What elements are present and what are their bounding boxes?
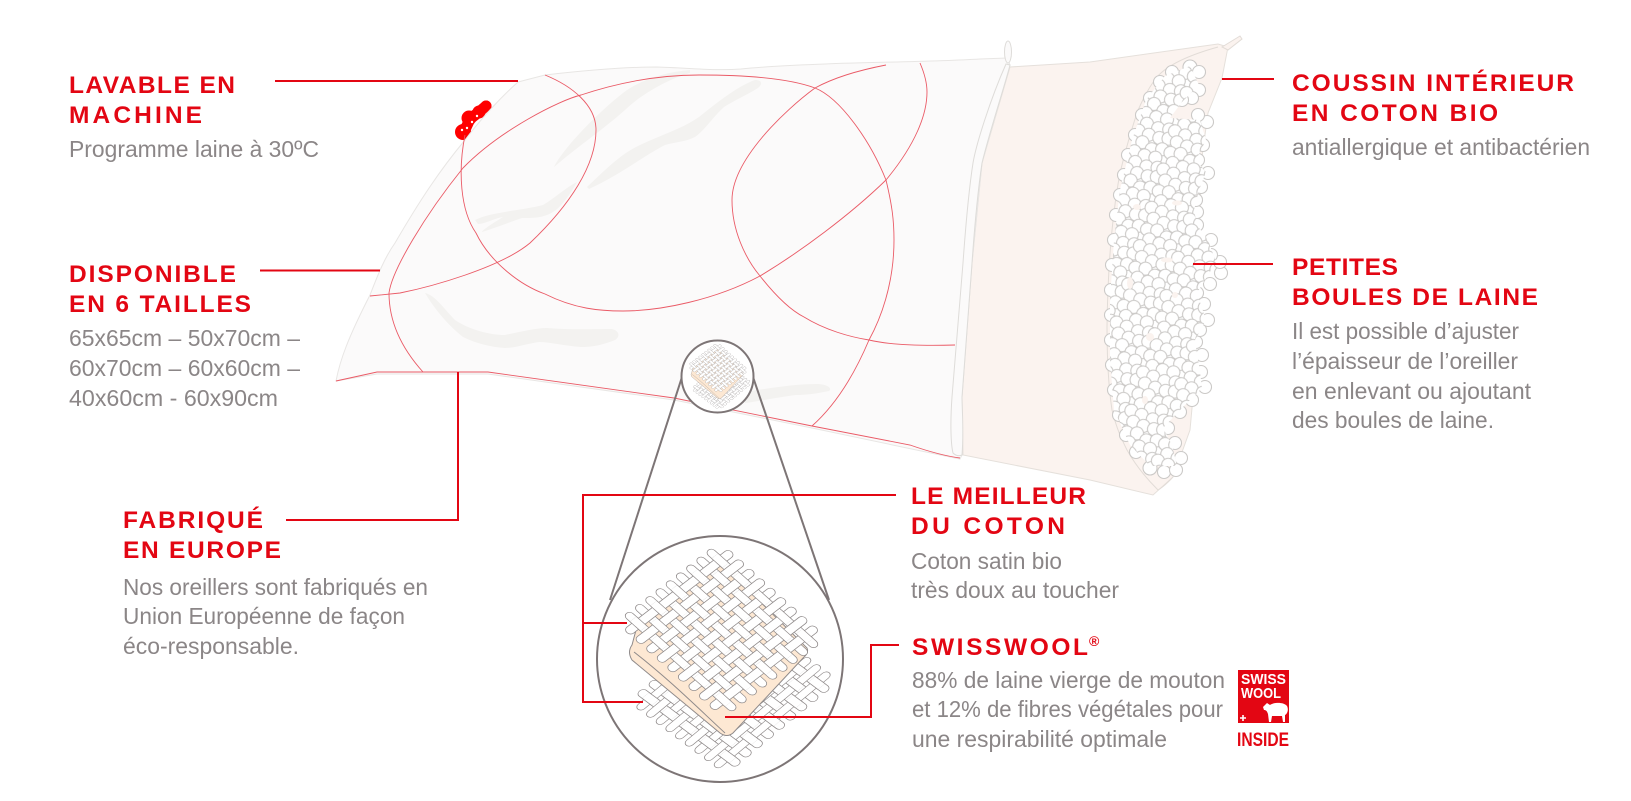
text block: le meilleur du coton [911, 483, 1119, 603]
text block: fabriqué en europe: éco-responsable. [123, 633, 299, 659]
text block: disponible en 6 tailles: 65x65cm – 50x70cm – [69, 325, 301, 351]
text block: swisswool [912, 633, 1225, 752]
text block: fabriqué en europe: FABRIQUÉ [123, 506, 263, 534]
inner cushion [962, 36, 1242, 495]
text block: disponible en 6 tailles: EN 6 TAILLES [69, 291, 251, 318]
text block: coussin intérieur: EN COTON BIO [1292, 100, 1498, 127]
pillow cover [336, 58, 1010, 459]
text block: swisswool: ® [1089, 633, 1100, 649]
text block: fabriqué en europe: EN EUROPE [123, 537, 281, 564]
text block: swisswool: une respirabilité optimale [912, 726, 1167, 752]
text block: fabriqué en europe: Union Européenne de façon [123, 603, 405, 629]
text block: petites boules de laine: l’épaisseur de l’oreiller [1292, 348, 1518, 374]
text block: coussin intérieur: antiallergique et antibactérien [1292, 134, 1590, 160]
large magnifier circle: fabric layers [597, 536, 843, 782]
callout lines [260, 79, 1274, 717]
crease marks [425, 70, 830, 403]
icon: sheep [1263, 703, 1288, 722]
red stitching seams [336, 63, 960, 458]
text block: fabriqué en europe: Nos oreillers sont fabriqués en [123, 574, 428, 600]
text block: lavable en machine: LAVABLE EN [69, 72, 235, 99]
text block: petites boules de laine: des boules de laine. [1292, 407, 1494, 433]
swisswool inside logo [1237, 670, 1289, 751]
swisswool inside logo: SWISS [1241, 671, 1286, 688]
swisswool inside logo: WOOL [1241, 685, 1281, 702]
text block: swisswool: SWISSWOOL [912, 634, 1088, 661]
text block: coussin intérieur: COUSSIN INTÉRIEUR [1292, 69, 1574, 97]
text block: petites boules de laine: en enlevant ou ajoutant [1292, 378, 1531, 404]
text block: lavable en machine: Programme laine à 30ºC [69, 136, 319, 162]
text block: petites boules de laine [1292, 254, 1538, 433]
text block: petites boules de laine: PETITES [1292, 254, 1398, 281]
text block: disponible en 6 tailles: DISPONIBLE [69, 261, 236, 288]
text block: swisswool: 88% de laine vierge de mouton [912, 667, 1225, 693]
text block: disponible en 6 tailles: 60x70cm – 60x60cm – [69, 355, 301, 381]
red label tag [455, 100, 492, 140]
cover opening band [951, 41, 1012, 456]
text block: swisswool: et 12% de fibres végétales pour [912, 696, 1223, 722]
text block: disponible en 6 tailles: 40x60cm - 60x90cm [69, 385, 278, 411]
text block: le meilleur du coton: LE MEILLEUR [911, 483, 1086, 510]
wool balls filling [1104, 60, 1228, 478]
text block: coussin intérieur [1292, 69, 1590, 160]
text block: petites boules de laine: BOULES DE LAINE [1292, 284, 1538, 311]
text block: le meilleur du coton: Coton satin bio [911, 548, 1062, 574]
illustration: pillow [336, 36, 1242, 495]
text block: lavable en machine: MACHINE [69, 102, 202, 129]
swisswool inside logo: INSIDE [1237, 730, 1289, 751]
text block: le meilleur du coton: très doux au toucher [911, 577, 1119, 603]
text block: lavable en machine [69, 72, 319, 162]
text block: le meilleur du coton: DU COTON [911, 513, 1065, 540]
text block: petites boules de laine: Il est possible d’ajuster [1292, 318, 1519, 344]
text block: disponible en 6 tailles [69, 261, 301, 411]
text block: fabriqué en europe [123, 506, 428, 659]
small magnifier circle [682, 340, 754, 412]
zoom lens connector lines [610, 377, 829, 600]
